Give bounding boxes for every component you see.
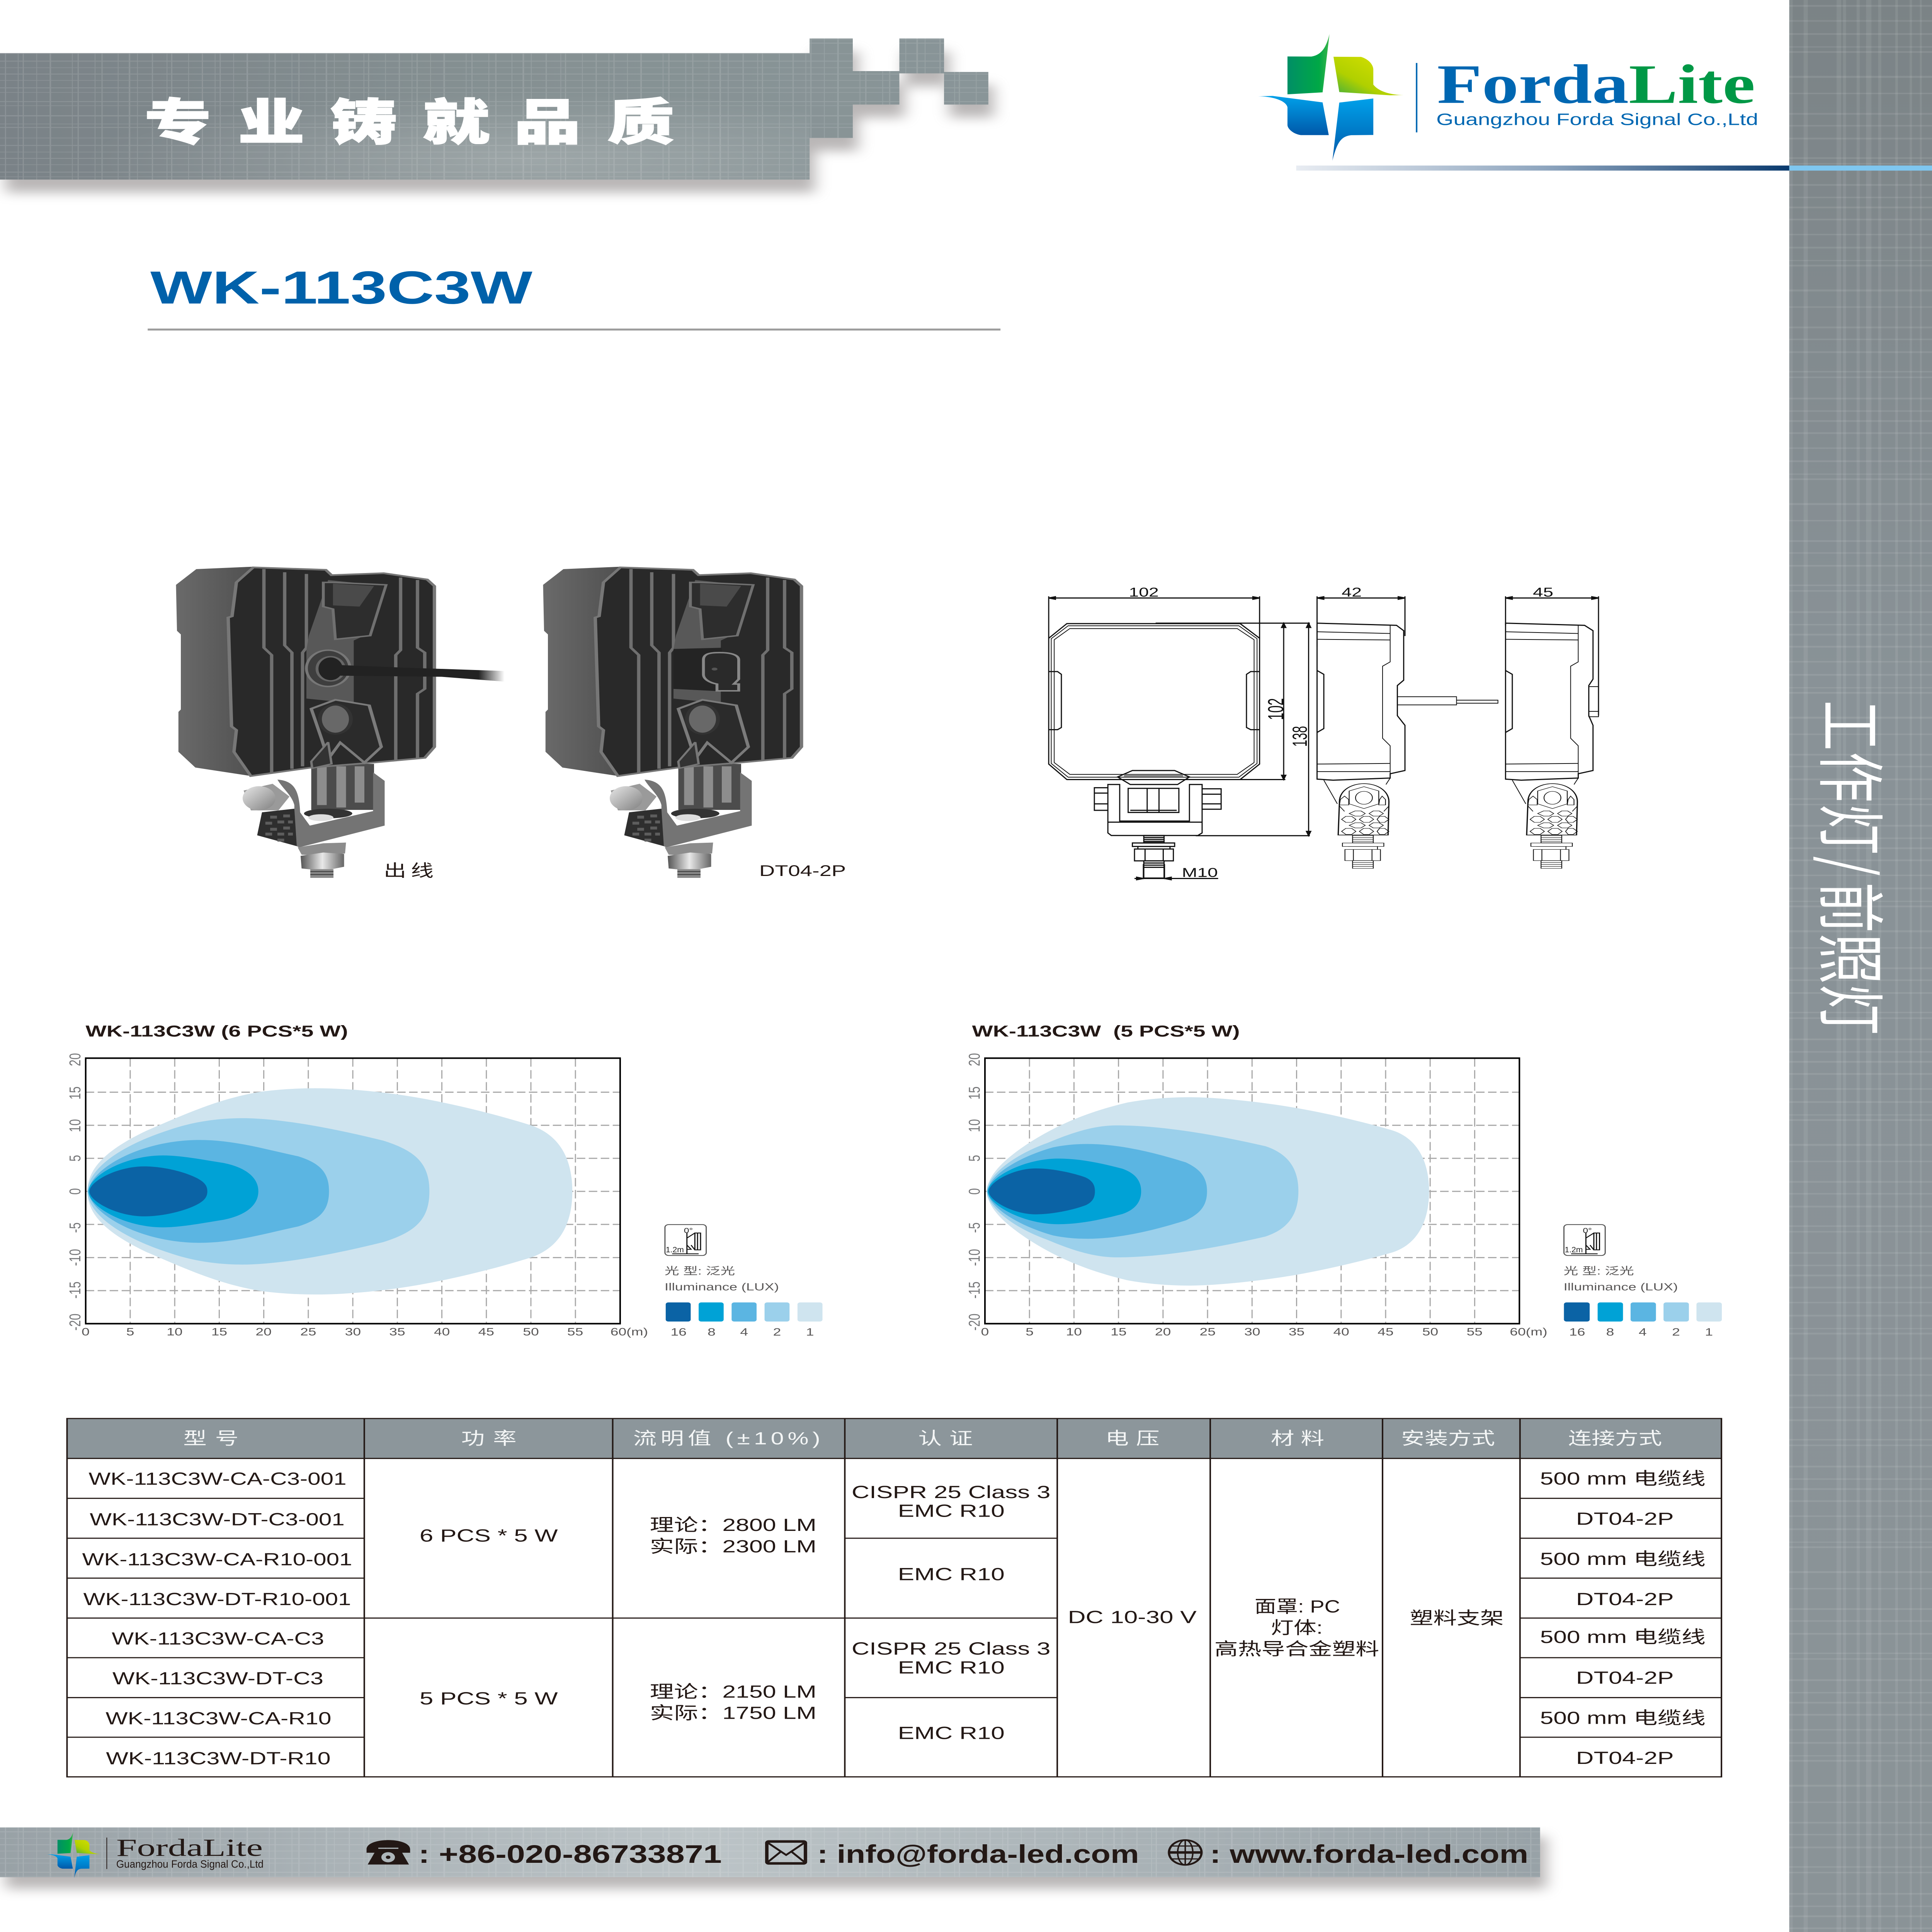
dimension drawing (1049, 585, 1599, 880)
dimension: width: 102 (1129, 585, 1159, 600)
x axis labels (82, 1325, 648, 1338)
x axis labels: 10 (1066, 1325, 1082, 1338)
icon: globe (1169, 1840, 1202, 1865)
certification column: EMC R10 (898, 1565, 1005, 1584)
lumen column: 实际：2300 LM (650, 1537, 816, 1556)
x axis labels: 30 (345, 1325, 361, 1338)
banner heading: 专业铸就品质 (145, 83, 674, 154)
material cell: 高热导合金塑料 (1214, 1639, 1379, 1659)
product title: WK-113C3W (150, 262, 533, 314)
x axis labels: 40 (1333, 1325, 1349, 1338)
connection column: 500 mm 电缆线 (1540, 1549, 1706, 1569)
dimension lines (1049, 596, 1599, 880)
footer logo mark (47, 1832, 101, 1878)
x axis labels: 20 (1155, 1325, 1171, 1338)
certification column (852, 1483, 1051, 1743)
x axis labels (981, 1325, 1548, 1338)
sidebar column (1789, 0, 1932, 1932)
gradient bar under logo (1296, 165, 1789, 171)
table header row: 电压 (1105, 1429, 1160, 1448)
x axis labels: 25 (1200, 1325, 1216, 1338)
power column: 5 PCS * 5 W (420, 1689, 558, 1708)
x axis labels: 50 (523, 1325, 539, 1338)
x axis labels: 50 (1422, 1325, 1438, 1338)
connection column: 500 mm 电缆线 (1540, 1628, 1706, 1647)
y axis labels: 5 (66, 1155, 84, 1162)
lumen column: 理论：2800 LM (650, 1515, 816, 1535)
footer tagline: Guangzhou Forda Signal Co.,Ltd (116, 1858, 264, 1870)
y axis labels: 0 (66, 1188, 84, 1195)
material cell: 面罩: PC (1255, 1597, 1340, 1616)
legend values (1569, 1326, 1713, 1338)
legend values: 2 (773, 1326, 781, 1338)
x axis labels: 20 (255, 1325, 272, 1338)
mounting icon (665, 1225, 706, 1255)
chart title: WK-113C3W (5 PCS*5 W) (972, 1022, 1240, 1040)
y axis labels: -5 (965, 1223, 983, 1233)
beam type label: 光 型: 泛光 (1563, 1265, 1634, 1277)
side mount: cable view (1338, 784, 1389, 868)
table header row: 型号 (183, 1429, 238, 1448)
y axis labels: -20 (965, 1314, 983, 1331)
mounting cell: 塑料支架 (1410, 1609, 1504, 1628)
connection column: 500 mm 电缆线 (1540, 1469, 1706, 1488)
model column: WK-113C3W-DT-R10 (106, 1749, 331, 1768)
icon: phone (367, 1840, 410, 1864)
x axis labels: 40 (434, 1325, 450, 1338)
grid and contours (86, 1058, 620, 1324)
header banner (0, 39, 994, 192)
y axis labels: 10 (965, 1119, 983, 1132)
mounting icon: 0° (1583, 1226, 1592, 1235)
table header row: 材料 (1271, 1429, 1324, 1448)
model column (82, 1469, 352, 1768)
chart title: WK-113C3W (6 PCS*5 W) (85, 1022, 348, 1040)
material cell (1214, 1597, 1379, 1659)
model column: WK-113C3W-DT-C3-001 (90, 1510, 345, 1529)
table header row: 安装方式 (1401, 1429, 1495, 1448)
table header row: 流明值 (±10%) (633, 1429, 820, 1448)
product photo: cable version (176, 567, 505, 878)
legend values: 2 (1672, 1326, 1680, 1338)
mounting icon (1564, 1225, 1605, 1255)
sidebar vertical label: 工作灯/前照灯 (1806, 700, 1905, 1035)
lumen column: 理论：2150 LM (650, 1682, 816, 1701)
mounting icon: 1.2m (666, 1245, 684, 1254)
dimension: height 102: 102 (1264, 698, 1288, 720)
certification column: EMC R10 (898, 1658, 1005, 1677)
x axis labels: 45 (478, 1325, 494, 1338)
beam type label: 光 型: 泛光 (665, 1265, 735, 1277)
dimension: depth 42: 42 (1342, 585, 1362, 600)
product photo: DT04-2P version (543, 567, 801, 878)
model column: WK-113C3W-CA-C3-001 (88, 1469, 347, 1489)
legend values: 16 (670, 1326, 687, 1338)
table header row: 认证 (918, 1429, 973, 1448)
x axis labels: 55 (1466, 1325, 1483, 1338)
legend values: 8 (707, 1326, 716, 1338)
x axis labels: 35 (1289, 1325, 1304, 1338)
model column: WK-113C3W-CA-R10 (105, 1709, 332, 1728)
connection column: 500 mm 电缆线 (1540, 1709, 1706, 1728)
dimension: height 138: 138 (1288, 726, 1311, 747)
footer wordmark: FordaLite (116, 1834, 263, 1861)
y axis labels: -10 (66, 1249, 84, 1266)
model column: WK-113C3W-CA-R10-001 (82, 1550, 352, 1569)
connection column: DT04-2P (1576, 1748, 1674, 1768)
chart: 5 PCS (965, 1022, 1722, 1338)
y axis labels: -15 (965, 1282, 983, 1299)
x axis labels: 35 (389, 1325, 405, 1338)
power column: 6 PCS * 5 W (420, 1526, 558, 1546)
logo wordmark: FordaLite (1437, 53, 1755, 115)
x axis labels: 55 (567, 1325, 583, 1338)
y axis labels: 15 (66, 1087, 84, 1100)
legend values: 1 (1705, 1326, 1713, 1338)
x axis labels: 15 (1111, 1325, 1127, 1338)
y axis labels: 10 (66, 1119, 84, 1132)
model column: WK-113C3W-DT-C3 (112, 1669, 323, 1688)
footer band (0, 1827, 1546, 1889)
x axis labels: 5 (1026, 1325, 1034, 1338)
dimension: depth 45: 45 (1533, 585, 1553, 600)
y axis labels: -5 (66, 1223, 84, 1233)
y axis labels (965, 1053, 983, 1331)
legend swatches (666, 1303, 823, 1321)
connection column: DT04-2P (1576, 1668, 1674, 1688)
table grid (67, 1418, 1721, 1777)
x axis labels: 5 (126, 1325, 134, 1338)
table header row: 功率 (461, 1429, 517, 1448)
material cell: 灯体: (1271, 1619, 1323, 1638)
x axis labels: 30 (1244, 1325, 1260, 1338)
table header row (67, 1418, 1721, 1458)
logo tagline: Guangzhou Forda Signal Co.,Ltd (1436, 111, 1758, 129)
power column (420, 1526, 558, 1708)
label: connector: DT04-2P (759, 862, 846, 880)
y axis labels: 20 (965, 1053, 983, 1066)
y axis labels: -15 (66, 1282, 84, 1299)
email: : info@forda-led.com (817, 1840, 1139, 1868)
x axis labels: 45 (1378, 1325, 1394, 1338)
x axis labels: 10 (167, 1325, 182, 1338)
legend values: 16 (1569, 1326, 1585, 1338)
legend values: 4 (740, 1326, 748, 1338)
illuminance label: Illuminance (LUX) (1563, 1281, 1678, 1293)
side view with cable (1317, 623, 1498, 804)
side view with connector (1505, 623, 1599, 804)
connection column (1540, 1469, 1706, 1768)
icon: envelope (767, 1842, 805, 1864)
x axis labels: 60(m) (1510, 1325, 1548, 1338)
lumen column (650, 1515, 816, 1723)
grid and contours (985, 1058, 1519, 1324)
connection column: DT04-2P (1576, 1509, 1674, 1529)
model column: WK-113C3W-DT-R10-001 (83, 1590, 351, 1609)
legend swatches (1564, 1303, 1722, 1321)
logo mark (1258, 34, 1404, 161)
legend values (670, 1326, 814, 1338)
table header row: 连接方式 (1568, 1429, 1662, 1448)
legend values: 1 (806, 1326, 814, 1338)
specification table (67, 1418, 1721, 1777)
certification column: EMC R10 (898, 1502, 1005, 1521)
voltage cell: DC 10-30 V (1068, 1608, 1197, 1627)
y axis labels: 5 (965, 1155, 983, 1162)
phone number: : +86-020-86733871 (418, 1840, 722, 1868)
y axis labels: 20 (66, 1053, 84, 1066)
certification column: CISPR 25 Class 3 (852, 1483, 1051, 1502)
x axis labels: 60(m) (611, 1325, 648, 1338)
x axis labels: 0 (82, 1325, 90, 1338)
website: : www.forda-led.com (1210, 1840, 1528, 1868)
certification column: CISPR 25 Class 3 (852, 1639, 1051, 1658)
illuminance label: Illuminance (LUX) (665, 1281, 779, 1293)
mounting icon: 0° (684, 1226, 693, 1235)
mounting icon: 1.2m (1565, 1245, 1583, 1254)
x axis labels: 25 (300, 1325, 316, 1338)
legend values: 8 (1606, 1326, 1614, 1338)
dimension: thread: M10 (1182, 866, 1218, 880)
y axis labels: -10 (965, 1249, 983, 1266)
lumen column: 实际：1750 LM (650, 1704, 816, 1723)
y axis labels: 0 (965, 1188, 983, 1195)
y axis labels: 15 (965, 1087, 983, 1100)
y axis labels: -20 (66, 1314, 84, 1331)
legend values: 4 (1639, 1326, 1647, 1338)
x axis labels: 0 (981, 1325, 989, 1338)
y axis labels (66, 1053, 84, 1331)
label: cable: 出线 (384, 861, 438, 880)
chart: 6 PCS (66, 1022, 823, 1338)
sidebar accent strip (1789, 165, 1932, 171)
certification column: EMC R10 (898, 1724, 1005, 1743)
front view (1049, 624, 1260, 878)
logo: FordaLite (1258, 34, 1758, 161)
model column: WK-113C3W-CA-C3 (112, 1629, 324, 1648)
connection column: DT04-2P (1576, 1590, 1674, 1609)
title rule (148, 328, 1000, 330)
x axis labels: 15 (211, 1325, 227, 1338)
side mount: connector view (1527, 784, 1577, 868)
